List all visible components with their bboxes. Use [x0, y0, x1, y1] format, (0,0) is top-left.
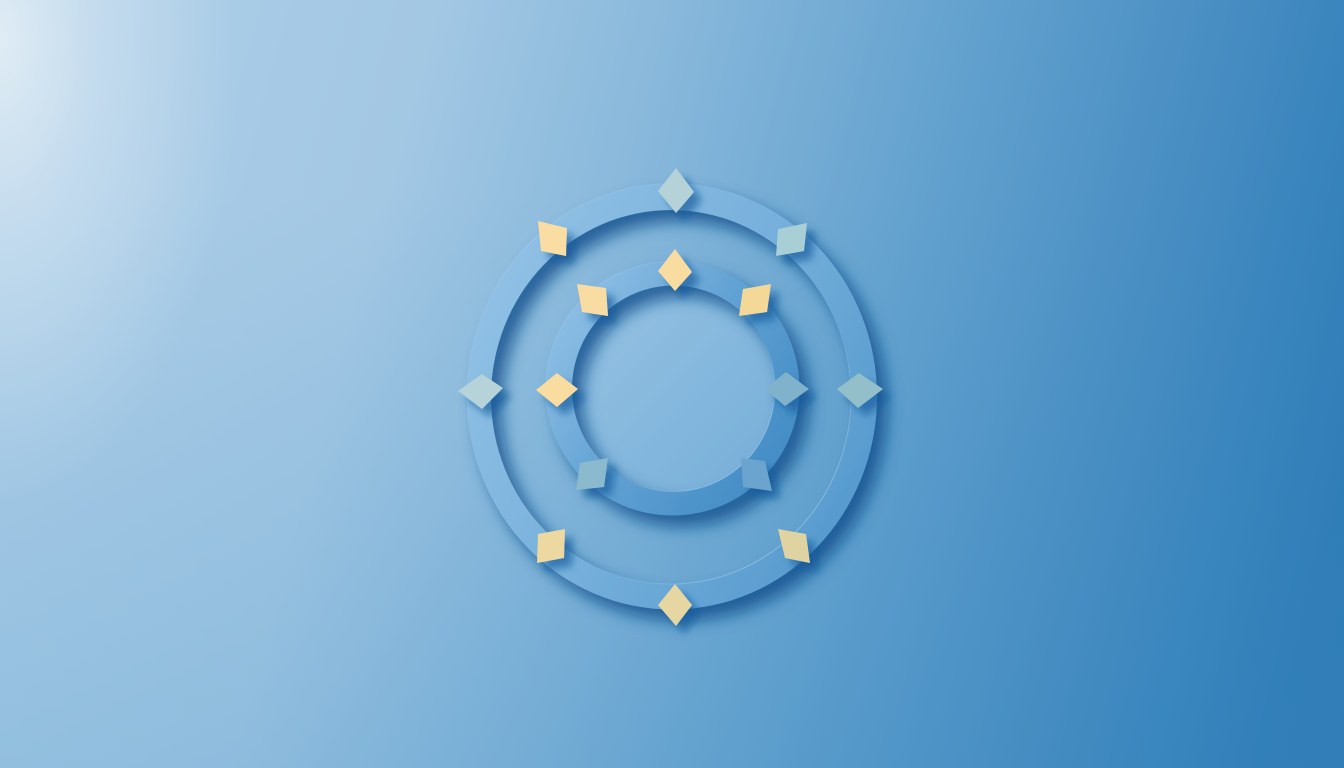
marker: outer upper left: [538, 221, 567, 256]
marker: inner upper left: [577, 284, 608, 316]
marker: inner lower right: [741, 458, 772, 491]
marker: inner lower left: [576, 458, 608, 490]
inner ring: [546, 262, 800, 516]
marker: outer lower right: [778, 529, 810, 563]
marker: outer upper right: [776, 223, 807, 256]
marker: inner upper right: [739, 284, 771, 316]
inner ring markers: [536, 249, 809, 491]
marker: inner left: [536, 373, 578, 407]
outer ring markers: [458, 168, 883, 626]
marker: outer bottom: [658, 584, 692, 626]
marker: outer lower left: [537, 529, 565, 563]
marker: outer left: [458, 374, 503, 409]
marker: inner top: [658, 249, 692, 291]
marker: outer right: [837, 373, 883, 408]
outer ring: [467, 184, 877, 610]
marker: outer top: [658, 168, 694, 213]
marker: inner right: [765, 372, 809, 406]
center disc: [570, 284, 778, 494]
